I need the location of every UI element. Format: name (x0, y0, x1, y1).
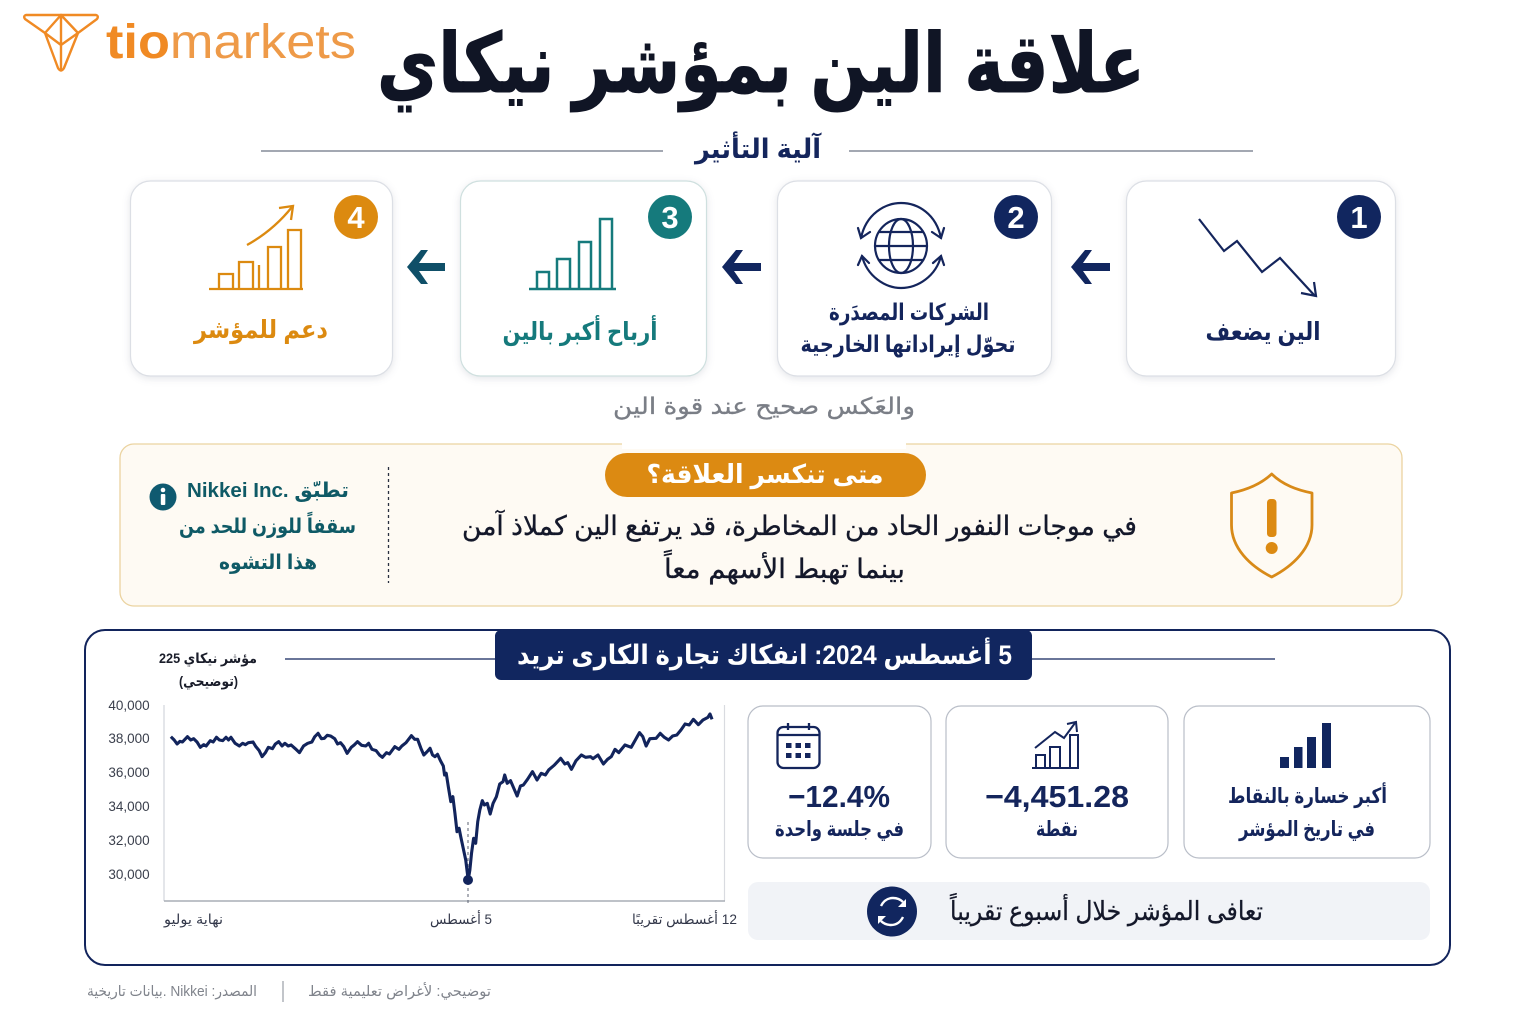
badge 4 (334, 195, 378, 239)
panel: step 2 (778, 181, 1052, 376)
note: توضيحي: لأغراض تعليمية فقط (308, 982, 491, 1000)
panel: August 5 2024 (85, 630, 1450, 965)
low point (463, 875, 473, 885)
icon: calendar (778, 723, 820, 768)
body text: في موجات النفور الحاد من المخاطرة، قد يرتفع الين كملاذ آمن (462, 510, 1137, 542)
logo: tiomarkets (24, 15, 356, 70)
y axis labels: 40,000 (108, 698, 150, 713)
icon: bars (529, 219, 616, 289)
body text: بينما تهبط الأسهم معاً (663, 549, 905, 585)
label (1228, 781, 1387, 841)
value: −12.4% (788, 779, 890, 814)
icon: rising bars (209, 206, 303, 289)
divider (388, 467, 390, 583)
label: الين يضعف (1206, 318, 1320, 347)
icon: globe with arrows (858, 203, 944, 288)
title: علاقة الين بمؤشر نيكاي (377, 19, 1145, 112)
label: تحوّل إيراداتها الخارجية (800, 331, 1016, 358)
text: تعافى المؤشر خلال أسبوع تقريباً (949, 892, 1263, 927)
icon: falling trend (1199, 219, 1316, 296)
x axis labels (163, 910, 737, 928)
label: الشركات المصدَرة (829, 299, 989, 326)
data line (171, 714, 712, 880)
source: المصدر: Nikkei .بيانات تاريخية (87, 984, 257, 1000)
y axis labels: 32,000 (108, 833, 150, 848)
chart title: (توضيحي) (179, 673, 238, 690)
icon: solid bars (1280, 723, 1331, 768)
y axis labels: 34,000 (108, 799, 150, 814)
arrow 1 to 2 (1071, 250, 1110, 284)
caption: reverse: والعَكس صحيح عند قوة الين (613, 393, 915, 420)
label: في جلسة واحدة (775, 818, 904, 841)
y axis labels (108, 698, 150, 882)
badge 2 (994, 195, 1038, 239)
arrow 3 to 4 (407, 250, 445, 284)
stat card: biggest loss (1184, 706, 1430, 858)
label: أكبر خسارة بالنقاط (1228, 781, 1387, 808)
badge 1 (1337, 195, 1381, 239)
note text: سقفاً للوزن للحد من (179, 511, 356, 538)
y axis labels: 36,000 (108, 765, 150, 780)
body text (462, 510, 1137, 585)
icon: chart (1032, 722, 1079, 768)
stat card: points (946, 706, 1168, 858)
label: دعم للمؤشر (192, 316, 328, 345)
panel: when the relation breaks (120, 441, 1402, 606)
line chart: Nikkei 225 (108, 650, 737, 928)
y axis labels: 30,000 (108, 867, 150, 882)
label: نقطة (1036, 818, 1078, 841)
x axis labels: نهاية يوليو (163, 911, 223, 928)
value: −4,451.28 (985, 779, 1129, 814)
footer (87, 981, 491, 1002)
label: أرباح أكبر بالين (502, 315, 658, 347)
y axis labels: 38,000 (108, 731, 150, 746)
note text: تطبّق ⁦Nikkei Inc.⁩ (187, 479, 349, 502)
badge 1: 1 (1350, 200, 1368, 235)
logo wordmark: tiomarkets (106, 16, 356, 69)
note text (179, 479, 356, 574)
heading (495, 630, 1032, 680)
panel: step 4 (130, 181, 392, 376)
icon: info (150, 484, 176, 510)
heading: mechanism: آلية التأثير (693, 131, 822, 165)
x axis labels: 12 أغسطس تقريبًا (632, 910, 737, 928)
label (800, 299, 1016, 358)
heading pill: متى تنكسر العلاقة؟ (646, 459, 884, 490)
icon: warning shield (1232, 474, 1312, 577)
chart title (159, 650, 257, 690)
chart title: مؤشر نيكاي 225 (159, 650, 257, 668)
recovery bar (748, 882, 1430, 940)
heading pill (605, 453, 926, 497)
badge 4: 4 (347, 200, 365, 235)
note text: هذا التشوه (219, 551, 317, 574)
label: في تاريخ المؤشر (1238, 818, 1375, 841)
x axis labels: 5 أغسطس (430, 910, 492, 928)
badge 2: 2 (1007, 200, 1025, 235)
badge 3 (648, 195, 692, 239)
heading: 5 أغسطس 2024: انفكاك تجارة الكارى تريد (517, 637, 1012, 671)
arrow 2 to 3 (722, 250, 761, 284)
icon: refresh (867, 886, 917, 936)
stat card: percent (748, 706, 931, 858)
icon: logo mark (24, 15, 98, 70)
panel: step 3 (460, 181, 706, 376)
panel: step 1 (1126, 181, 1396, 376)
badge 3: 3 (661, 200, 679, 235)
